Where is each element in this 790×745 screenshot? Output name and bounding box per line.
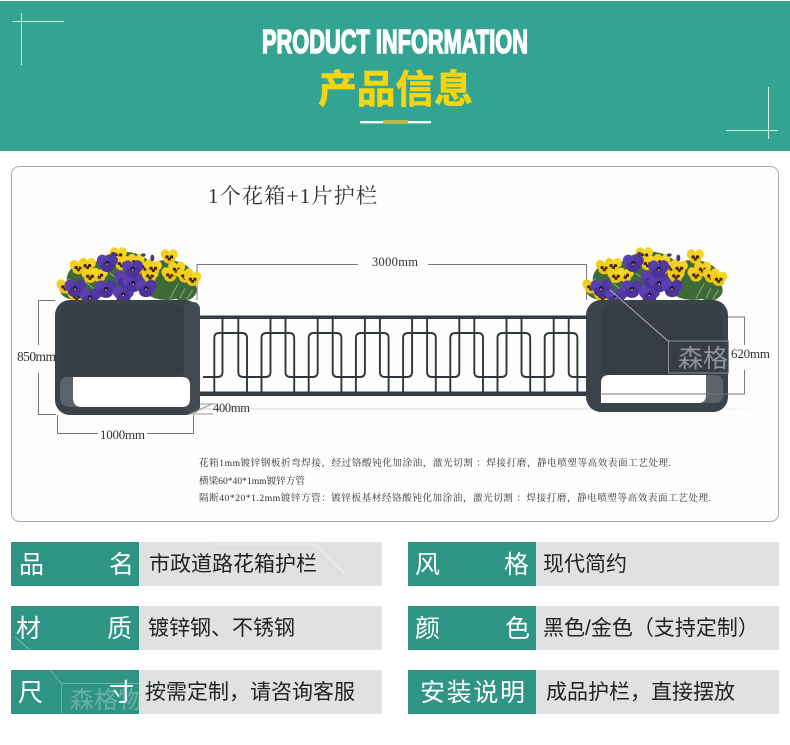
spec row: 风格	[408, 542, 779, 586]
spec row: 材质	[11, 606, 382, 650]
spec row: 品名	[11, 542, 382, 586]
right planter with flowers	[582, 247, 728, 412]
ground shadow	[200, 408, 770, 410]
dimension: 850mm: 850mm	[17, 349, 56, 364]
spec row: 尺寸: 尺	[18, 679, 43, 707]
spec row: 风格: 风	[415, 551, 440, 579]
spec row: 尺寸	[11, 670, 382, 714]
header banner	[0, 1, 790, 151]
specification notes: 花箱1mm镀锌钢板折弯焊接，经过铬酸钝化加涂油，激光切割 ：焊接打磨，静电喷塑等高效表面工艺处理.	[199, 457, 671, 469]
watermark on rows: 森格物	[70, 687, 142, 714]
panel: product diagram	[12, 166, 778, 522]
spec row: 颜色	[408, 606, 779, 650]
title: PRODUCT INFORMATION: PRODUCT INFORMATION	[262, 23, 528, 60]
spec row: 品名: 名	[109, 551, 134, 579]
decorative corner mark: top left	[12, 13, 64, 65]
decorative corner mark: bottom right	[726, 87, 778, 139]
title underline	[360, 120, 431, 124]
spec row: 颜色: 色	[505, 615, 530, 643]
spec row: 尺寸: 寸	[109, 679, 134, 707]
left planter with flowers	[55, 247, 201, 415]
dimension: 400mm: 400mm	[213, 401, 250, 415]
right planter body	[586, 300, 728, 412]
spec row: 颜色: 颜	[415, 615, 440, 643]
dimension: 620mm: 620mm	[731, 346, 770, 361]
spec row: 尺寸: 按需定制，请咨询客服	[145, 681, 355, 704]
spec row: 材质: 镀锌钢、不锈钢	[148, 617, 295, 640]
flowers: left	[56, 247, 201, 306]
spec row: 材质: 质	[107, 615, 132, 643]
dimension: 620mm	[706, 317, 770, 394]
dimension: 1000mm: 1000mm	[100, 427, 145, 442]
specification notes: 隔断40*20*1.2mm镀锌方管：镀锌板基材经铬酸钝化加涂油，激光切割 ：焊接打磨，静电喷塑等高效表面工艺处理.	[199, 492, 711, 504]
spec row: 安装说明: 安装说明	[420, 679, 525, 707]
diagram caption: 1个花箱+1片护栏	[208, 184, 377, 208]
spec row: 风格: 格	[504, 551, 529, 579]
dimension: 3000mm: 3000mm	[372, 255, 418, 269]
left planter body	[55, 300, 200, 415]
specification notes	[199, 457, 711, 504]
spec row: 安装说明	[408, 670, 779, 714]
spec row: 品名: 品	[19, 551, 44, 579]
dimension: 3000mm	[197, 255, 586, 300]
watermark on diagram: 森格	[678, 345, 728, 373]
flowers: right	[582, 247, 727, 306]
fence	[200, 316, 601, 396]
watermark on diagram	[610, 290, 728, 373]
dimension: 1000mm	[58, 415, 194, 442]
title: Chinese: 产品信息	[318, 69, 473, 112]
dimension: 400mm	[190, 401, 250, 415]
spec row: 风格: 现代简约	[543, 553, 627, 576]
spec row: 颜色: 黑色/金色（支持定制）	[543, 617, 759, 640]
watermark on rows	[50, 670, 161, 714]
spec row: 材质: 材	[16, 615, 41, 643]
specification notes: 横梁60*40*1mm镀锌方管	[199, 475, 305, 487]
spec row: 品名: 市政道路花箱护栏	[149, 553, 317, 576]
spec row: 安装说明: 成品护栏，直接摆放	[546, 681, 735, 704]
dimension: 850mm	[17, 300, 56, 414]
